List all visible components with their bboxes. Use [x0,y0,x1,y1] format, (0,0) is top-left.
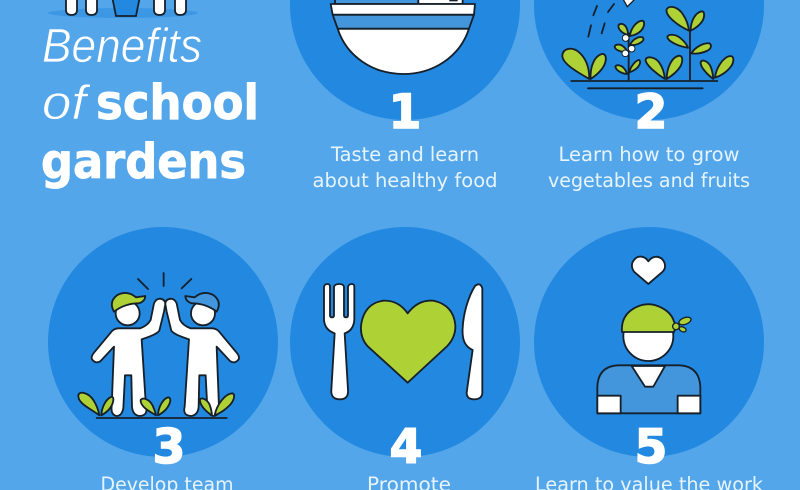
icon: gardener with bandana and heart [597,257,700,413]
text: benefit 2: Learn how to grow [558,143,740,166]
panel: benefit 4 circle [290,227,520,457]
icon: fork [324,284,354,399]
figure: left child [92,293,165,416]
title [41,20,259,190]
figure: right child [165,293,239,416]
text: benefit 1: Taste and learn [330,143,479,166]
text: benefit 1: about healthy food [312,169,498,192]
number 1: 1 [389,85,421,140]
number 2: 2 [635,85,667,140]
illustration: children and plant pot feet [48,0,198,18]
icon: heart [361,301,455,383]
icon: bowl of food [331,0,475,74]
panel: benefit 3 circle [48,227,278,457]
icon: two children high five [78,273,239,418]
number 5: 5 [635,420,667,475]
panel: benefit 5 circle [534,227,764,457]
title: gardens [41,134,246,190]
title: Benefits [42,20,202,73]
icon: small heart [632,257,665,284]
title: school [96,75,259,131]
icon: leaves at feet [78,393,234,415]
number 4: 4 [390,420,422,475]
title: of [42,77,91,130]
panel: benefit 2 circle [534,0,764,120]
text: benefit 2: vegetables and fruits [548,169,750,192]
icon: knife [463,284,482,399]
panel: benefit 1 circle [290,0,520,120]
number 3: 3 [153,420,185,475]
icon: fork, heart and knife [324,284,482,399]
icon: growing plants and watering can [562,0,733,88]
